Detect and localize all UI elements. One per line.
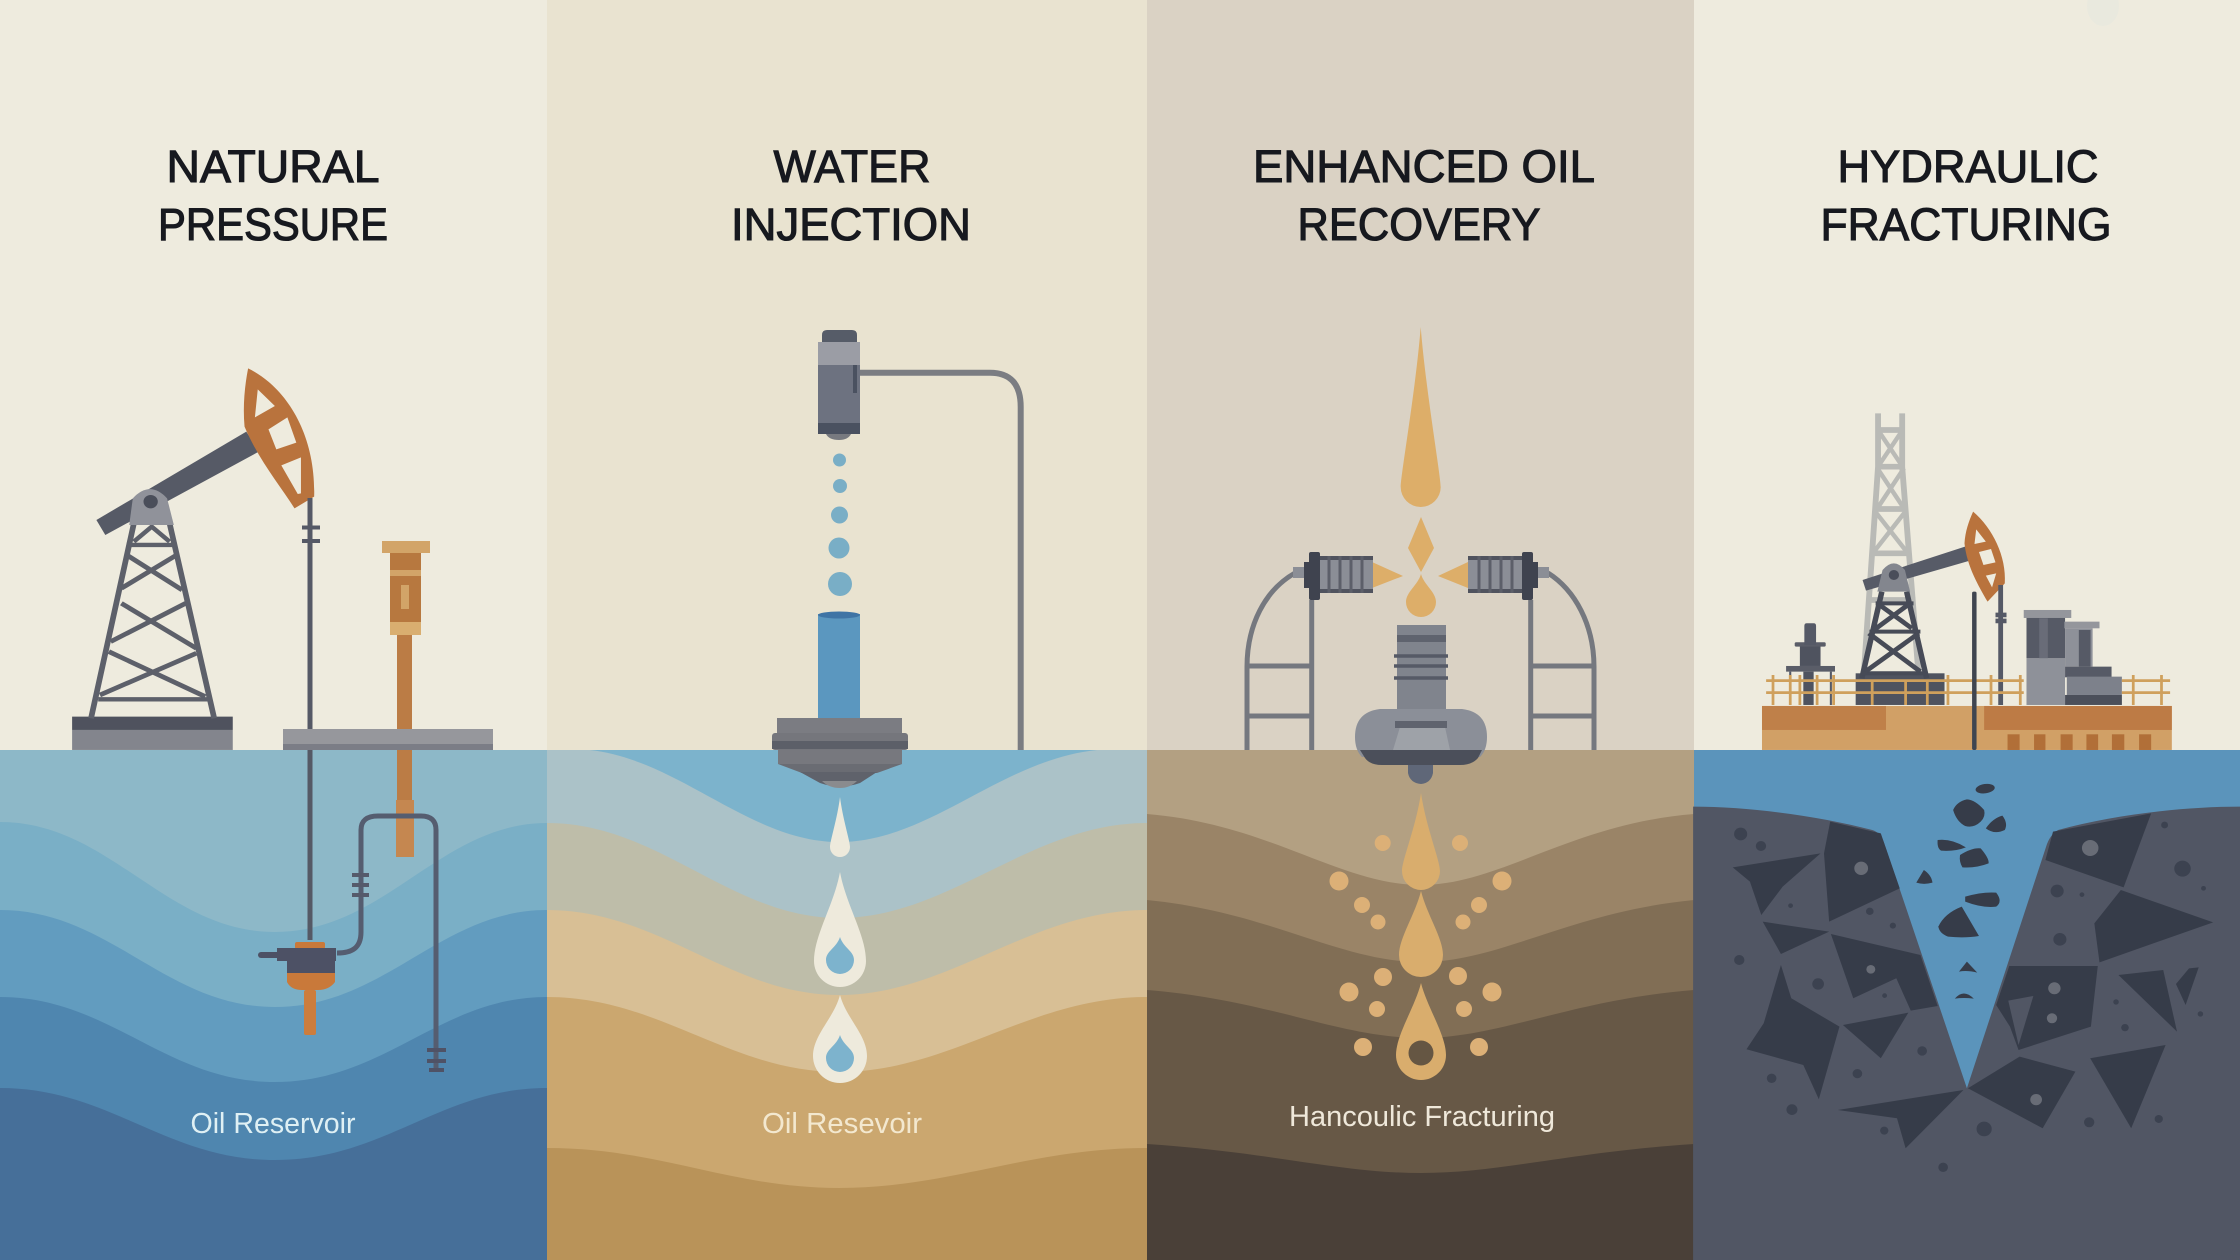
deck railing <box>1766 675 2170 705</box>
pump rod <box>1995 585 2007 705</box>
pump horsehead <box>1964 512 2005 602</box>
dark pebbles <box>1734 822 2206 1172</box>
tall tank <box>2024 610 2071 705</box>
icon: pump jack <box>72 368 314 750</box>
panel: enhanced oil recovery <box>1147 0 1694 1260</box>
drill pipe <box>1972 592 1977 750</box>
icon: left ladder frame <box>1247 573 1312 750</box>
icon: right ladder frame <box>1531 573 1594 750</box>
second tank <box>2064 622 2100 667</box>
icon: water column <box>818 612 860 719</box>
icon: injected water drops <box>813 797 867 1083</box>
heading: enhanced oil recovery: ENHANCED OIL <box>1253 141 1595 192</box>
inner light shard <box>2008 996 2033 1045</box>
icon: water droplets <box>828 454 852 596</box>
icon: wellhead flange <box>772 718 908 788</box>
label: oil reservoir: Oil Reservoir <box>190 1108 356 1140</box>
heading: natural pressure: NATURAL <box>166 141 380 192</box>
heading: hydraulic fracturing: HYDRAULIC <box>1838 141 2098 192</box>
panel: natural pressure <box>0 0 547 1260</box>
rock fragments in the fracture <box>1916 783 2006 999</box>
icon: sucker rod <box>302 498 320 940</box>
panel: water injection <box>547 0 1147 1260</box>
label: oil reservoir: Oil Resevoir <box>762 1108 922 1140</box>
pump tower <box>1862 592 1927 678</box>
icon: looping flow pipe <box>337 816 446 1070</box>
shattered rock formation <box>1693 783 2240 1260</box>
left equipment <box>1786 623 1835 705</box>
icon: oil drops <box>1396 793 1446 1080</box>
heading: water injection: INJECTION <box>731 199 971 250</box>
rock mass <box>1693 807 2240 1260</box>
heading: hydraulic fracturing: FRACTURING <box>1820 199 2112 250</box>
pump base <box>1856 673 1945 705</box>
icon: wellhead valve and pipe <box>382 541 430 857</box>
derrick tower <box>1864 413 1919 677</box>
icon: left coil injector <box>1293 552 1373 600</box>
heading: water injection <box>731 141 971 250</box>
platform deck <box>1762 706 2172 750</box>
heading: natural pressure <box>158 141 388 250</box>
icon: right coil injector <box>1468 552 1549 600</box>
pump bearing <box>1889 570 1899 580</box>
heading: enhanced oil recovery <box>1253 141 1595 250</box>
horsehead windows <box>1974 529 1996 587</box>
icon: downhole pump <box>258 942 336 1035</box>
icon: central wellhead <box>1355 625 1487 784</box>
stacked machinery <box>2065 667 2122 705</box>
icon: rising oil plume <box>1372 327 1468 617</box>
icon: injector head <box>818 330 860 440</box>
platform <box>283 729 493 750</box>
pump saddle <box>1877 563 1910 592</box>
icon: oil dots <box>1330 835 1512 1056</box>
panel: hydraulic fracturing <box>1693 0 2240 1260</box>
icon: supply pipe <box>860 373 1021 750</box>
dark fractured shards <box>1733 813 2213 1148</box>
pump beam <box>1863 546 1972 591</box>
icon: offshore rig <box>1762 413 2172 750</box>
heading: hydraulic fracturing <box>1820 141 2112 250</box>
heading: natural pressure: PRESSURE <box>158 199 388 250</box>
heading: water injection: WATER <box>774 141 930 192</box>
light pebbles <box>1854 840 2098 1105</box>
label: fracturing: Hancoulic Fracturing <box>1289 1101 1555 1133</box>
heading: enhanced oil recovery: RECOVERY <box>1298 199 1540 250</box>
